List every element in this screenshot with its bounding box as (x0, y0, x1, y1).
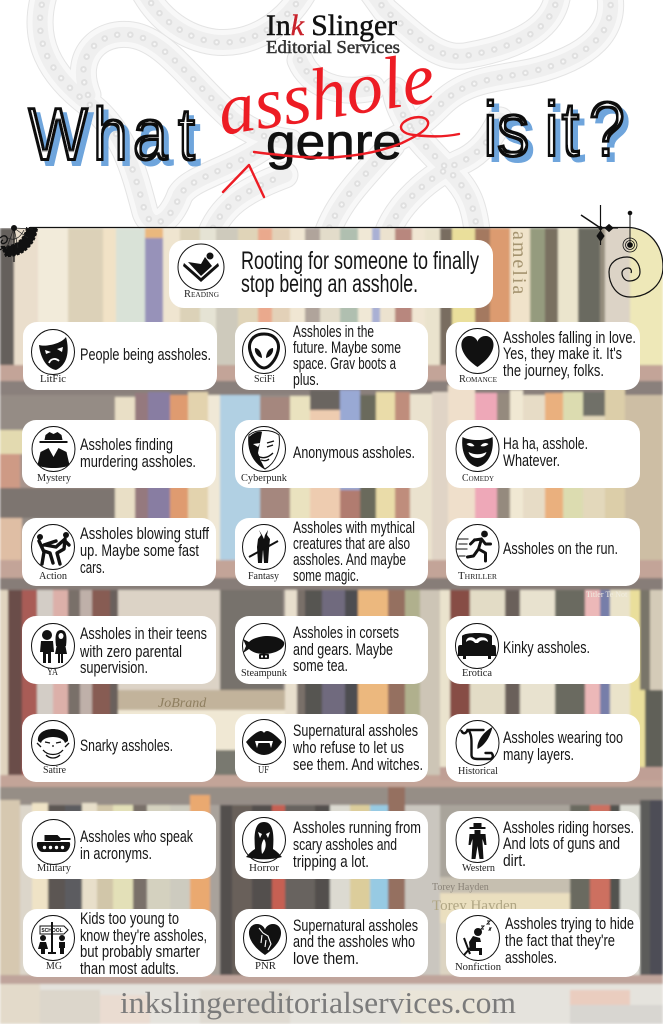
label: MG (46, 961, 62, 972)
label: UF (258, 765, 269, 776)
book spine lettering: Titler Te Not (586, 590, 628, 599)
description: Whatever. (503, 451, 560, 470)
description: Assholes in corsets (293, 623, 399, 642)
icon: scroll and quill (456, 720, 499, 766)
description: future. Maybe some (293, 338, 401, 357)
icon: cowboy (456, 818, 499, 862)
icon: tank (32, 820, 75, 864)
gear corner ornament (0, 225, 37, 262)
description (241, 247, 479, 298)
description: Kinky assholes. (503, 638, 590, 657)
book spine lettering: Torey Hayden (432, 882, 489, 893)
description: the fact that they're (505, 931, 615, 950)
panel: Satire (22, 714, 216, 782)
description: with zero parental (79, 642, 182, 661)
octopus illustration (40, 0, 611, 240)
description (505, 914, 634, 967)
description: Assholes on the run. (503, 539, 618, 558)
description: scary assholes and (293, 835, 397, 854)
panel: SciFi (235, 322, 428, 390)
panel: Steampunk (235, 616, 428, 684)
label: Erotica (462, 668, 493, 679)
description: Assholes blowing stuff (80, 524, 209, 543)
label: Reading (184, 289, 219, 300)
panel: Horror (235, 811, 428, 879)
panel: Nonfiction (446, 909, 640, 977)
panel: Cyberpunk (235, 420, 428, 488)
description: love them. (293, 949, 359, 968)
panel: Erotica (446, 616, 640, 684)
icon: alien head (242, 328, 286, 374)
description: know they're assholes, (80, 926, 207, 945)
panel: PNR (235, 909, 428, 977)
description: but probably smarter (80, 942, 200, 961)
icon: elf pair with sword (242, 524, 286, 570)
description: many layers. (503, 745, 574, 764)
book spine lettering: Torey Hayden (432, 898, 518, 914)
label: YA (47, 667, 59, 678)
description: Assholes wearing too (503, 728, 623, 747)
description: Supernatural assholes (293, 721, 418, 740)
bookshelf background photo (0, 228, 663, 1024)
label: Military (37, 863, 71, 874)
description (80, 827, 193, 863)
description: People being assholes. (80, 345, 211, 364)
description (292, 721, 423, 774)
description: cars. (80, 558, 105, 577)
description (293, 916, 418, 968)
icon: screaming ghost (242, 818, 286, 862)
description (503, 434, 588, 470)
label: Fantasy (248, 571, 279, 582)
description: Ha ha, asshole. (503, 434, 588, 453)
website footer: inkslingereditorialservices.com (120, 985, 516, 1020)
icon: teen pair (32, 624, 74, 668)
panel: LitFic (23, 322, 217, 390)
description: Assholes in their teens (80, 624, 207, 643)
label: Steampunk (241, 668, 287, 679)
book spine lettering: amelia (508, 231, 530, 296)
description: dirt. (503, 851, 526, 870)
description (293, 623, 399, 675)
description: stop being an asshole. (241, 270, 418, 298)
icon: grinning boy (32, 720, 74, 766)
icon: anonymous mask (242, 426, 286, 472)
description: some magic. (293, 566, 359, 585)
panel: Romance (446, 322, 640, 390)
description: Assholes with mythical (293, 518, 415, 537)
description (79, 624, 207, 677)
description: than most adults. (80, 959, 179, 978)
book spine lettering: JoBrand (158, 696, 207, 711)
icon: school sign with kids (32, 916, 74, 960)
label: SciFi (254, 374, 275, 385)
logo: Editorial Services (266, 37, 400, 57)
description: and gears. Maybe (293, 640, 393, 659)
label: LitFic (40, 374, 67, 385)
description: Yes, they make it. It's (503, 344, 622, 363)
label: Cyberpunk (241, 473, 287, 484)
panel: MG (23, 909, 216, 978)
panel: Action (22, 518, 216, 586)
description: Kids too young to (80, 909, 179, 928)
icon: heart (456, 328, 499, 374)
white corner above the spiral border (630, 220, 663, 267)
description: up. Maybe some fast (80, 541, 199, 560)
description: space. Grav boots a (293, 354, 396, 373)
label: Romance (459, 374, 497, 385)
icon: sleeping writer at desk (456, 916, 500, 960)
book spine lettering (158, 231, 628, 914)
red correction strike and caret (223, 117, 459, 197)
description: And lots of guns and (503, 834, 620, 853)
label: Western (462, 863, 495, 874)
handwritten word: asshole: asshole (212, 37, 440, 152)
struck word: genre: genre (266, 114, 402, 170)
icon: reader on open book (178, 244, 224, 290)
description: Assholes finding (80, 435, 173, 454)
panel: Military (22, 811, 216, 879)
panel: Western (446, 811, 640, 879)
description: murdering assholes. (80, 452, 196, 471)
description: plus. (293, 370, 319, 389)
icon: running figure (456, 524, 499, 570)
logo (266, 9, 400, 57)
panel: Thriller (446, 518, 640, 586)
description: who refuse to let us (292, 738, 404, 757)
logo: Ink Slinger (266, 9, 397, 42)
description (503, 728, 623, 764)
description: assholes. And maybe (293, 550, 406, 569)
title (28, 37, 630, 197)
title word: is it?: is it? (488, 91, 630, 178)
description: creatures that are also (293, 534, 410, 553)
label: Satire (43, 765, 67, 776)
icon: heart with wolf (244, 916, 286, 960)
top border line with spiral ornament (30, 211, 663, 297)
icon: kicking fighters (32, 524, 74, 570)
panel: YA (22, 616, 216, 684)
label: Mystery (37, 473, 71, 484)
title word: What: What (33, 97, 200, 181)
icon: comedy mask (456, 426, 499, 472)
clock hands ornament (581, 205, 618, 245)
panel: Historical (446, 714, 640, 782)
description (503, 818, 634, 870)
description: Snarky assholes. (80, 736, 173, 755)
panel: Comedy (446, 420, 640, 488)
description (293, 818, 421, 871)
panel: Reading (169, 240, 493, 308)
description (80, 435, 196, 471)
label: Comedy (462, 473, 494, 484)
description (80, 909, 207, 978)
icon: school sign with kids: SCHOOL (41, 928, 63, 934)
description: Assholes who speak (80, 827, 193, 846)
label: Action (39, 571, 67, 582)
description: in acronyms. (80, 844, 152, 863)
description: see them. And witches. (293, 755, 423, 774)
label: Thriller (458, 571, 497, 582)
label: PNR (255, 961, 276, 972)
panel: Mystery (22, 420, 216, 488)
description: Rooting for someone to finally (241, 247, 479, 275)
icon: fanged lips (242, 720, 286, 764)
description: the journey, folks. (503, 361, 604, 380)
description (503, 328, 636, 380)
description: tripping a lot. (293, 852, 369, 871)
description: Assholes running from (293, 818, 421, 837)
description: Assholes in the (293, 322, 374, 341)
panel: Fantasy (235, 518, 428, 586)
icon: zeppelin (242, 624, 286, 668)
description: assholes. (505, 948, 557, 967)
icon: bed (456, 624, 498, 668)
description (293, 518, 415, 585)
description (293, 322, 401, 389)
label: Horror (249, 863, 280, 874)
description: Supernatural assholes (293, 916, 418, 935)
icon: detective (32, 426, 75, 472)
title word: What: What (28, 92, 195, 176)
icon: tragedy mask (32, 330, 74, 374)
panel: UF (235, 714, 428, 782)
description: Anonymous assholes. (293, 443, 415, 462)
title word: is it?: is it? (483, 86, 625, 173)
description (80, 524, 209, 577)
description: supervision. (80, 658, 148, 677)
label: Nonfiction (455, 962, 501, 973)
description: some tea. (293, 656, 348, 675)
description: and the assholes who (293, 932, 415, 951)
label: Historical (458, 766, 498, 777)
